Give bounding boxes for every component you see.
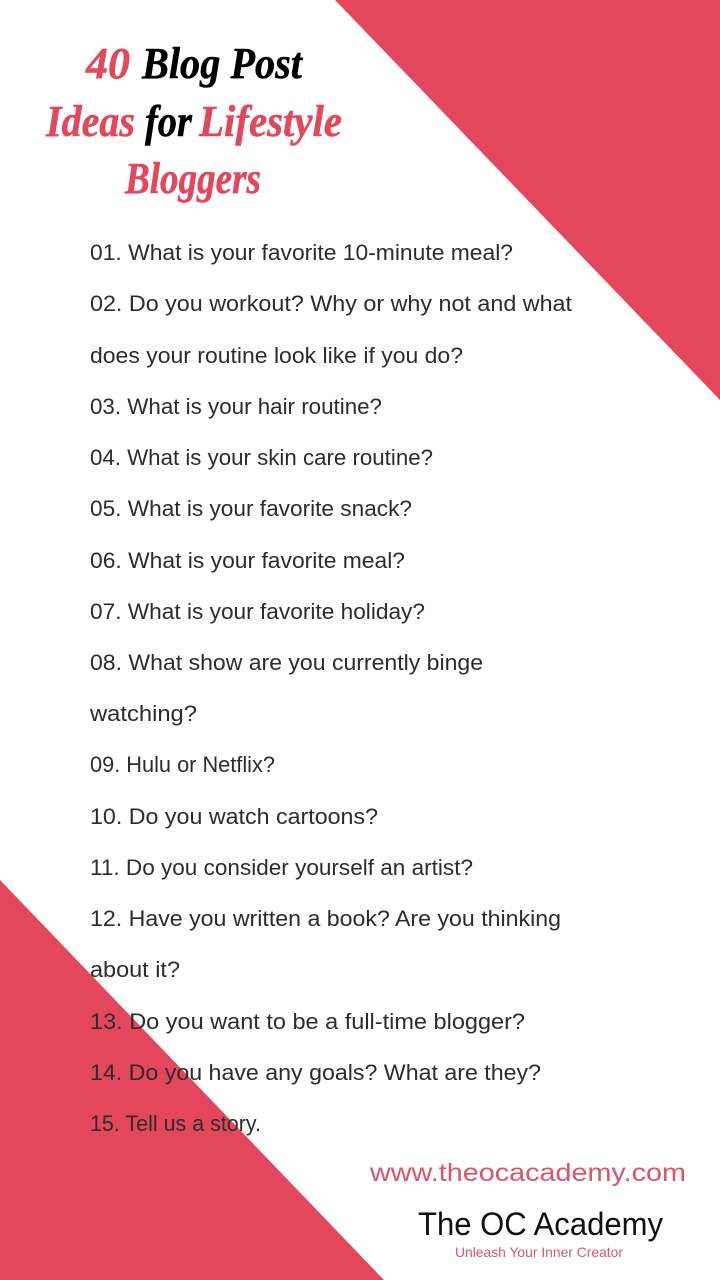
list of blog post ideas: 15. Tell us a story.	[90, 1111, 261, 1136]
title: 40	[85, 39, 130, 88]
website url: www.theocacademy.com	[369, 1159, 686, 1187]
list of blog post ideas: watching?	[89, 701, 197, 726]
list of blog post ideas: 05. What is your favorite snack?	[90, 496, 412, 521]
list of blog post ideas: 08. What show are you currently binge	[90, 650, 483, 675]
list of blog post ideas: 14. Do you have any goals? What are they?	[90, 1060, 541, 1085]
decorative triangle: top right	[335, 0, 720, 400]
list of blog post ideas: does your routine look like if you do?	[90, 343, 463, 368]
list of blog post ideas: 13. Do you want to be a full-time blogger?	[90, 1009, 525, 1034]
decorative triangle: bottom left	[0, 880, 384, 1280]
list of blog post ideas: 04. What is your skin care routine?	[90, 445, 433, 470]
list of blog post ideas: 09. Hulu or Netflix?	[90, 752, 275, 777]
title: Blog Post	[141, 39, 304, 88]
title: Ideas	[45, 97, 135, 146]
list of blog post ideas: 12. Have you written a book? Are you thinking	[90, 906, 561, 931]
list of blog post ideas: 02. Do you workout? Why or why not and what	[90, 291, 572, 316]
title: Bloggers	[124, 154, 261, 203]
title: Lifestyle	[198, 97, 342, 146]
list of blog post ideas: 03. What is your hair routine?	[90, 394, 382, 419]
list of blog post ideas: 10. Do you watch cartoons?	[90, 804, 378, 829]
list of blog post ideas: 11. Do you consider yourself an artist?	[90, 855, 473, 880]
list of blog post ideas	[89, 240, 572, 1136]
list of blog post ideas: 06. What is your favorite meal?	[90, 548, 405, 573]
tagline: Unleash Your Inner Creator	[455, 1244, 623, 1260]
list of blog post ideas: 07. What is your favorite holiday?	[90, 599, 425, 624]
title: for	[145, 97, 193, 146]
list of blog post ideas: about it?	[90, 957, 180, 982]
title	[45, 39, 342, 203]
list of blog post ideas: 01. What is your favorite 10-minute meal?	[90, 240, 513, 265]
brand name: The OC Academy	[418, 1206, 663, 1242]
